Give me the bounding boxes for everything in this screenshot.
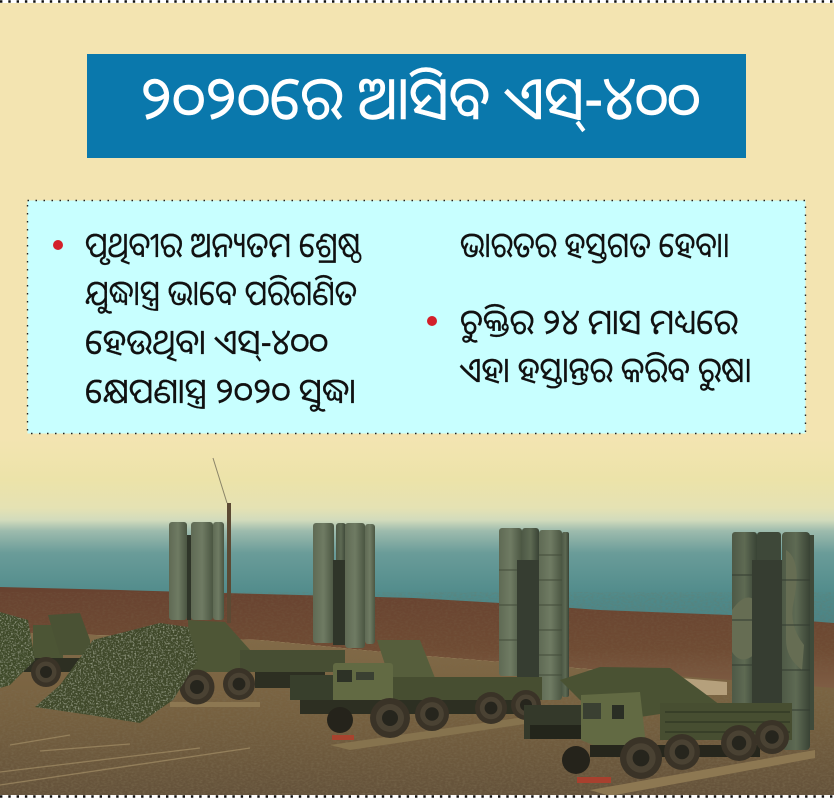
- text block: right column bottom: ଚୁକ୍ତିର ୨୪ ମାସ ମଧ୍ୟରେ: [460, 298, 738, 345]
- truck 4: [524, 667, 792, 783]
- truck 2: [170, 620, 345, 707]
- truck 3: [290, 640, 542, 740]
- camouflage net: [35, 623, 198, 723]
- truck 1 (left, behind net): [20, 613, 90, 687]
- text block: right column bottom: ଏହା ହସ୍ତାନ୍ତର କରିବ ରୁଷ।: [459, 346, 752, 393]
- top dotted edge: [0, 0, 834, 3]
- bullet 2: [427, 316, 437, 326]
- bullet 1: [53, 240, 63, 250]
- pale track marks: [0, 735, 250, 785]
- text block: left column: [85, 221, 362, 414]
- sea: [0, 520, 834, 630]
- hillside: [0, 587, 834, 690]
- text block: left column: ପୃଥିବୀର ଅନ୍ୟତମ ଶ୍ରେଷ୍ଠ: [85, 221, 362, 268]
- title banner: [87, 54, 746, 158]
- sand platforms under vehicles: [590, 750, 815, 796]
- left camouflage net: [0, 612, 35, 688]
- text block: left column: ହେଉଥିବା ଏସ୍-୪୦୦: [85, 318, 328, 365]
- pale gravel patch: [681, 678, 727, 695]
- launcher 1: [169, 458, 231, 623]
- launcher 3: [499, 528, 569, 700]
- text block: left column: ଯୁଦ୍ଧାସ୍ତ୍ର ଭାବେ ପରିଗଣିତ: [85, 269, 357, 316]
- launcher 2: [313, 523, 375, 648]
- title text: ୨୦୨୦ରେ ଆସିବ ଏସ୍-୪୦୦: [140, 55, 700, 137]
- text block: right column top: ଭାରତର ହସ୍ତଗତ ହେବା।: [460, 221, 730, 268]
- ground: [0, 632, 834, 798]
- text block: left column: କ୍ଷେପଣାସ୍ତ୍ର ୨୦୨୦ ସୁଦ୍ଧା: [85, 367, 356, 414]
- text block: right column bottom: [459, 298, 752, 393]
- bottom dotted edge: [0, 795, 834, 798]
- sky: [0, 440, 834, 520]
- launcher 4: [732, 532, 814, 750]
- photo: S-400 launchers on the coast: [0, 440, 834, 798]
- panel: key facts: [28, 200, 806, 434]
